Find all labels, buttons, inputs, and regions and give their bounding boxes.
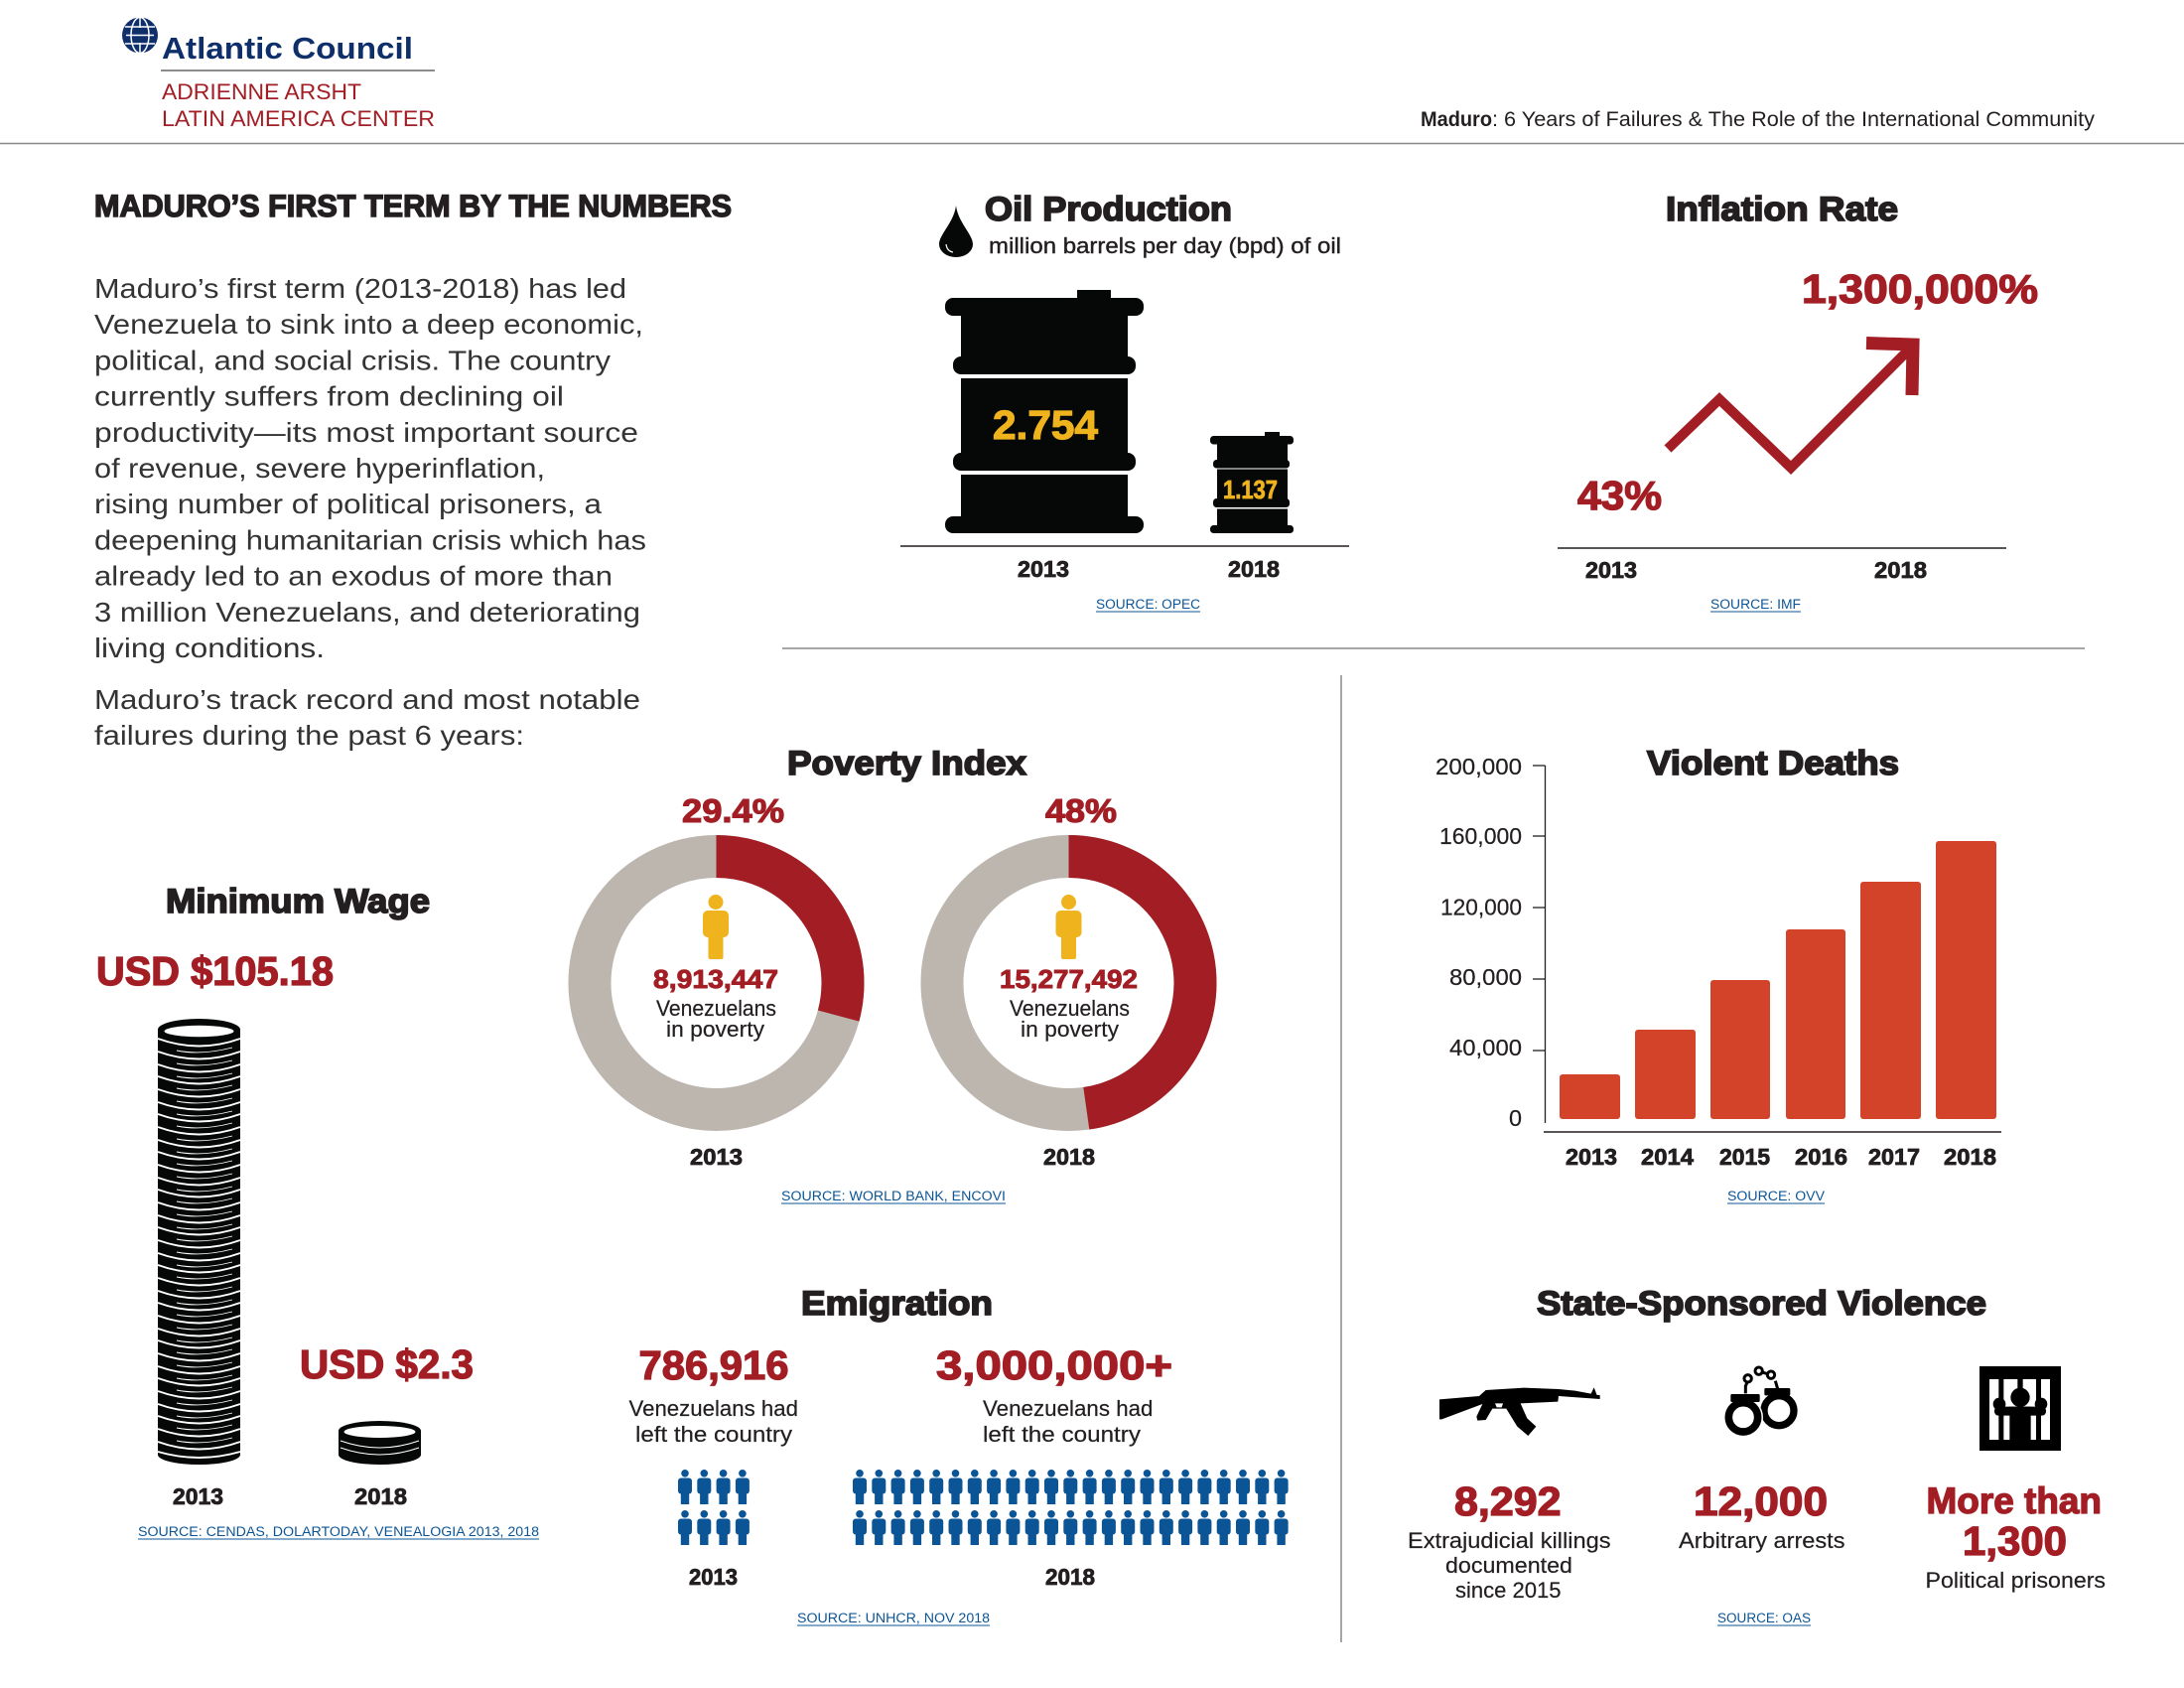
stat: prisoners: More than [1926,1480,2102,1521]
year labels [1566,1144,1996,1170]
stat: arrests: Arbitrary arrests [1679,1528,1844,1553]
year labels [689,1564,1095,1590]
year labels: 2018 [1874,557,1927,583]
stat: prisoners: 1,300 [1963,1518,2067,1564]
panel: inflation rate [1558,191,2038,612]
bar chart: 80,000 [1449,964,1522,990]
count 2018: in poverty [1021,1017,1119,1042]
caption 2013: left the country [635,1422,792,1447]
intro text block: political, and social crisis. The country [94,345,611,375]
percentage 2018: 48% [1045,792,1117,829]
year labels: 2018 [354,1483,407,1509]
stat: arrests [1679,1478,1844,1553]
heading: Violent Deaths [1647,745,1899,782]
small barrel 2018 [1210,432,1294,533]
pictogram 2013 [678,1470,750,1545]
center name: ADRIENNE ARSHT [162,79,361,104]
year labels [690,1144,1095,1170]
caption 2018: Venezuelans had [983,1396,1154,1421]
panel: state-sponsored violence [1408,1285,2106,1625]
intro text block: Maduro’s track record and most notable [94,684,640,715]
source: SOURCE: OAS [1717,1611,1811,1625]
icon: short coin stack [339,1421,421,1465]
bar chart: 160,000 [1439,823,1522,849]
value 2018: 3,000,000+ [936,1342,1172,1388]
stat: killings: Extrajudicial killings [1408,1528,1610,1553]
caption 2018 [983,1396,1154,1447]
count 2018: 15,277,492 [1000,964,1138,994]
heading: Poverty Index [787,745,1026,782]
source: SOURCE: WORLD BANK, ENCOVI [781,1189,1006,1203]
arrow: rising line [1668,344,1913,468]
panel: poverty index [590,745,1195,1203]
document subtitle: : 6 Years of Failures & The Role of the International Community [1492,108,2096,131]
big barrel 2013 [945,290,1144,533]
year labels: 2016 [1795,1144,1847,1170]
icon: tall coin stack [158,1019,240,1465]
year labels: 2018 [1045,1564,1095,1590]
count 2013 [653,964,778,1042]
intro text block: living conditions. [94,633,325,663]
header: Atlantic Council logo [122,17,435,131]
big barrel 2013: 2.754 [993,402,1098,448]
value 2013: 43% [1577,473,1662,518]
center name: LATIN AMERICA CENTER [162,106,435,131]
bar chart: 200,000 [1435,754,1522,779]
icon: globe [122,17,158,54]
heading: State-Sponsored Violence [1537,1285,1986,1323]
value 2018: USD $2.3 [300,1341,474,1387]
intro text block: 3 million Venezuelans, and deteriorating [94,597,640,628]
icon: oil drop [939,206,973,257]
unit label: million barrels per day (bpd) of oil [989,233,1341,258]
year labels [1018,556,1280,582]
source: SOURCE: OPEC [1096,597,1200,612]
intro text block: currently suffers from declining oil [94,381,564,412]
panel: violent deaths [1435,745,2001,1203]
bar chart [1435,754,2001,1132]
year labels: 2018 [1228,556,1280,582]
value 2013: 786,916 [639,1342,788,1388]
intro text block: Maduro’s first term (2013-2018) has led [94,273,626,304]
stat: arrests: 12,000 [1694,1478,1828,1524]
icon: person 2018 [1056,895,1082,959]
icon: person 2013 [703,895,729,959]
year labels: 2013 [1585,557,1637,583]
intro text block: Venezuela to sink into a deep economic, [94,309,643,340]
icon: rifle [1439,1387,1600,1436]
bar chart: 120,000 [1440,894,1522,919]
icon: handcuffs [1723,1367,1794,1437]
donut 2018 [942,856,1195,1110]
heading: Minimum Wage [166,883,430,920]
year labels: 2014 [1641,1144,1694,1170]
intro text block: failures during the past 6 years: [94,720,524,751]
value 2018: 1,300,000% [1802,266,2038,312]
source: SOURCE: IMF [1710,597,1801,612]
count 2018: Venezuelans [1010,996,1130,1021]
year labels: 2018 [1043,1144,1095,1170]
count 2013: 8,913,447 [653,964,778,994]
year labels: 2013 [689,1564,738,1590]
small barrel 2018: 1.137 [1223,475,1278,504]
year labels: 2013 [1018,556,1069,582]
intro text block: already led to an exodus of more than [94,561,613,592]
intro text block: productivity—its most important source [94,417,638,448]
icon: prisoner behind bars [1979,1366,2061,1451]
panel: emigration [629,1285,1289,1625]
count 2013: in poverty [666,1017,764,1042]
heading: Oil Production [985,191,1232,228]
stat: killings: documented [1445,1553,1572,1578]
year labels: 2017 [1868,1144,1920,1170]
year labels [173,1483,407,1509]
stat: prisoners: Political prisoners [1926,1568,2106,1593]
bar chart: 40,000 [1449,1035,1522,1060]
document subtitle: Maduro [1421,108,1492,131]
center name [162,79,435,131]
intro text block [94,273,646,751]
heading: Emigration [801,1285,993,1323]
year labels: 2013 [1566,1144,1617,1170]
stat: killings [1408,1478,1610,1603]
stat: prisoners [1926,1480,2106,1593]
intro text block: of revenue, severe hyperinflation, [94,453,545,484]
logo wordmark: Atlantic Council [162,31,413,66]
heading: Inflation Rate [1666,191,1898,228]
caption 2013 [629,1396,798,1447]
year labels: 2015 [1719,1144,1770,1170]
count 2018 [1000,964,1138,1042]
year labels [1585,557,1927,583]
year labels: 2013 [173,1483,223,1509]
year labels: 2018 [1944,1144,1996,1170]
donut 2013 [590,856,843,1110]
value 2013: USD $105.18 [96,948,334,994]
stat: killings: since 2015 [1455,1578,1561,1603]
panel: minimum wage [96,883,539,1539]
main heading: MADURO’S FIRST TERM BY THE NUMBERS [94,188,732,223]
caption 2013: Venezuelans had [629,1396,798,1421]
bar chart: 0 [1509,1105,1522,1131]
source: SOURCE: OVV [1727,1189,1825,1203]
source: SOURCE: UNHCR, NOV 2018 [797,1611,990,1625]
intro text block: deepening humanitarian crisis which has [94,524,646,555]
source: SOURCE: CENDAS, DOLARTODAY, VENEALOGIA 2013, 2018 [138,1524,539,1539]
count 2013: Venezuelans [656,996,776,1021]
intro text block: rising number of political prisoners, a [94,489,602,519]
percentage 2013: 29.4% [682,792,784,829]
caption 2018: left the country [983,1422,1141,1447]
stat: killings: 8,292 [1454,1478,1561,1524]
year labels: 2013 [690,1144,743,1170]
panel: oil production [900,191,1349,612]
pictogram 2018 [853,1470,1289,1545]
